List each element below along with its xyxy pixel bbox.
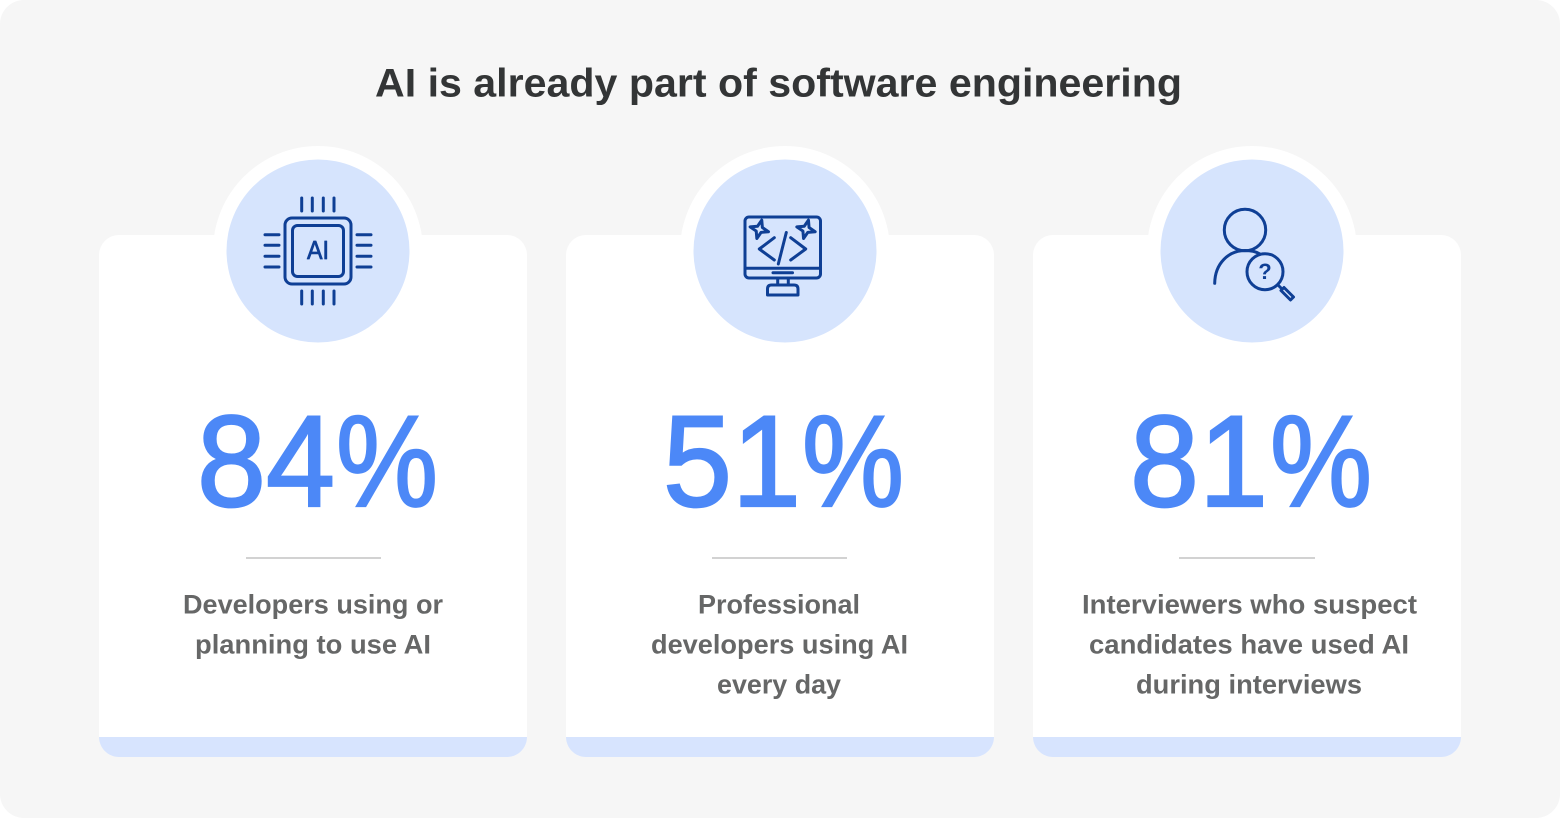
icon badge halo bbox=[1147, 146, 1357, 356]
icon badge circle bbox=[1160, 160, 1344, 342]
icon badge halo bbox=[213, 146, 423, 356]
card bottom strip bbox=[99, 737, 527, 757]
title: AI is already part of software engineering bbox=[375, 62, 1182, 106]
icon badge halo bbox=[680, 146, 890, 356]
description: Developers using or bbox=[183, 590, 443, 620]
statistic: 81%: % bbox=[1270, 388, 1372, 534]
divider bbox=[1179, 557, 1315, 559]
icon badge circle bbox=[694, 160, 876, 342]
icon: person with magnifier: ? bbox=[1258, 259, 1272, 284]
statistic: 51%: 51 bbox=[663, 388, 801, 534]
description: Professional bbox=[698, 590, 860, 620]
divider bbox=[712, 557, 847, 559]
card body bbox=[566, 235, 994, 757]
description: every day bbox=[717, 670, 841, 700]
description bbox=[1082, 590, 1417, 700]
card body bbox=[1033, 235, 1461, 757]
statistic: 51%: % bbox=[802, 388, 904, 534]
statistic: 81% bbox=[1130, 388, 1372, 534]
description: planning to use AI bbox=[195, 630, 431, 660]
description bbox=[183, 590, 443, 660]
statistic: 84%: 84 bbox=[197, 388, 335, 534]
card bottom strip bbox=[1033, 737, 1461, 757]
description: during interviews bbox=[1136, 670, 1362, 700]
statistic: 81%: 81 bbox=[1130, 388, 1268, 534]
icon: AI chip bbox=[265, 198, 371, 304]
panel: interviewers bbox=[1033, 146, 1461, 757]
statistic: 51% bbox=[663, 388, 904, 534]
icon: code monitor bbox=[745, 217, 820, 295]
description: candidates have used AI bbox=[1089, 630, 1409, 660]
statistic: 84% bbox=[197, 388, 438, 534]
description bbox=[651, 590, 908, 700]
panel: professional developers bbox=[566, 146, 994, 757]
card body bbox=[99, 235, 527, 757]
icon: AI chip: AI bbox=[307, 235, 329, 265]
description: developers using AI bbox=[651, 630, 908, 660]
card bottom strip bbox=[566, 737, 994, 757]
divider bbox=[246, 557, 381, 559]
icon: person with magnifier bbox=[1215, 209, 1294, 300]
description: Interviewers who suspect bbox=[1082, 590, 1417, 620]
statistic: 84%: % bbox=[336, 388, 438, 534]
icon badge circle bbox=[226, 160, 410, 342]
panel: developers using AI bbox=[99, 146, 527, 757]
